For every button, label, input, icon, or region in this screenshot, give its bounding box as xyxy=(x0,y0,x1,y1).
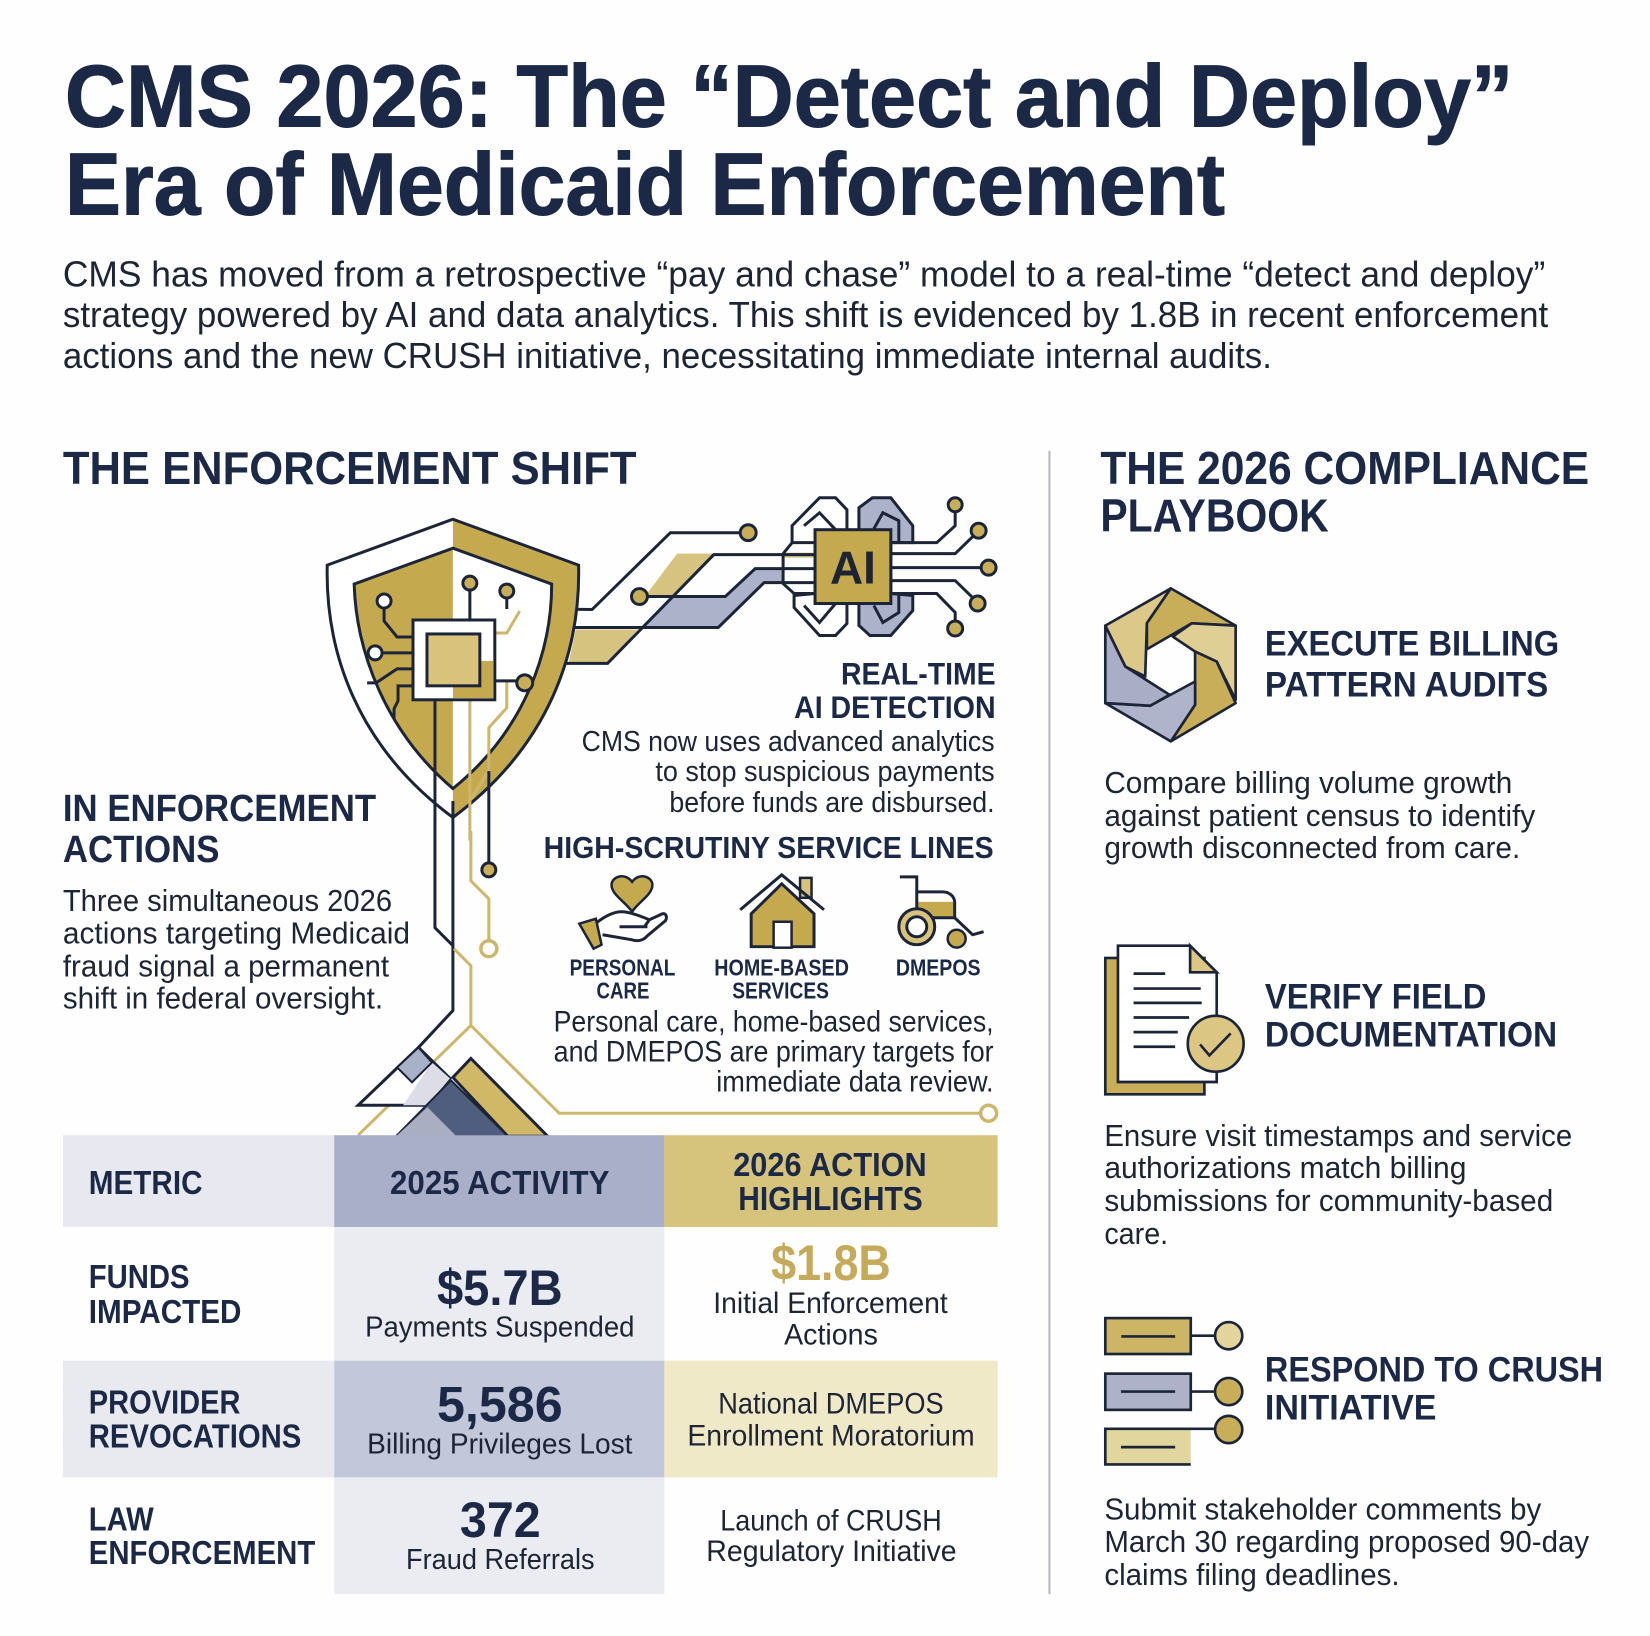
panel: respond to CRUSH initiative xyxy=(1104,1318,1603,1592)
comparison table xyxy=(63,1135,998,1594)
title xyxy=(65,48,1513,233)
table row: provider revocations xyxy=(89,1377,975,1460)
text: in enforcement actions: actions targeting Medicaid xyxy=(63,916,410,951)
table row: law enforcement: 372 xyxy=(460,1492,541,1548)
heading: high-scrutiny service lines: HIGH-SCRUTINY SERVICE LINES xyxy=(544,830,994,865)
title: Era of Medicaid Enforcement xyxy=(65,135,1225,233)
intro text block: CMS has moved from a retrospective “pay and chase” model to a real-time “detect and deploy” xyxy=(63,253,1545,294)
title: CMS 2026: The “Detect and Deploy” xyxy=(65,48,1513,146)
body text: field documentation: care. xyxy=(1104,1216,1168,1251)
text: real-time AI detection: to stop suspicious payments xyxy=(655,756,995,788)
text: in enforcement actions xyxy=(63,788,410,1016)
table row: funds impacted: Actions xyxy=(784,1319,878,1352)
text: real-time AI detection xyxy=(582,655,996,819)
circuit traces between shield and AI brain xyxy=(495,525,815,663)
table header row xyxy=(89,1146,927,1217)
table row: funds impacted: $5.7B xyxy=(437,1260,563,1316)
heading: verify field documentation: VERIFY FIELD xyxy=(1265,978,1486,1017)
icon: home-based services xyxy=(740,875,824,948)
heading: execute billing pattern audits: PATTERN AUDITS xyxy=(1265,665,1548,704)
table row: law enforcement: ENFORCEMENT xyxy=(89,1534,315,1571)
body text: field documentation: submissions for community-based xyxy=(1104,1183,1553,1218)
body text: billing audits: growth disconnected from care. xyxy=(1104,830,1520,865)
panel: execute billing pattern audits xyxy=(1104,588,1559,865)
geometric arrow shapes above the table xyxy=(358,1047,548,1136)
heading: verify field documentation xyxy=(1265,978,1557,1054)
table header row: HIGHLIGHTS xyxy=(738,1180,923,1217)
table row: funds impacted: IMPACTED xyxy=(89,1293,241,1330)
table row: provider revocations: REVOCATIONS xyxy=(89,1417,301,1454)
table row: provider revocations: Enrollment Moratorium xyxy=(687,1419,975,1452)
text: real-time AI detection: AI DETECTION xyxy=(794,689,996,725)
intro text block: strategy powered by AI and data analytics. This shift is evidenced by 1.8B in recent enforcement xyxy=(63,294,1548,335)
table row: provider revocations: PROVIDER xyxy=(89,1384,241,1421)
table row: funds impacted: FUNDS xyxy=(89,1258,190,1295)
service line labels: SERVICES xyxy=(732,978,829,1004)
panel: verify field documentation xyxy=(1104,946,1572,1251)
table row: law enforcement xyxy=(89,1492,957,1576)
body text: CRUSH initiative: Submit stakeholder comments by xyxy=(1104,1491,1542,1526)
circuit lines descending from shield xyxy=(358,771,997,1135)
heading: execute billing pattern audits: EXECUTE BILLING xyxy=(1265,624,1559,663)
icon: document with check xyxy=(1105,946,1244,1094)
service line labels: DMEPOS xyxy=(896,955,981,981)
service line labels: HOME-BASED xyxy=(714,955,849,981)
table row: law enforcement: Launch of CRUSH xyxy=(720,1504,942,1537)
table row: funds impacted xyxy=(89,1235,948,1352)
table header row: 2025 ACTIVITY xyxy=(390,1164,610,1201)
table row: provider revocations: Billing Privileges Lost xyxy=(367,1428,632,1460)
service line labels: CARE xyxy=(597,978,649,1004)
icon: linked form fields xyxy=(1105,1318,1242,1464)
text: in enforcement actions: shift in federal oversight. xyxy=(63,981,383,1016)
table row: law enforcement: Regulatory Initiative xyxy=(706,1535,957,1568)
table row: funds impacted: Initial Enforcement xyxy=(713,1287,948,1320)
text: in enforcement actions: IN ENFORCEMENT xyxy=(63,788,376,830)
service line description: immediate data review. xyxy=(716,1065,994,1098)
icon: shield with chip xyxy=(327,519,579,840)
panel: high-scrutiny service lines xyxy=(544,830,994,1098)
text: in enforcement actions: Three simultaneous 2026 xyxy=(63,883,392,918)
body text: CRUSH initiative: March 30 regarding proposed 90-day xyxy=(1104,1524,1590,1559)
table row: funds impacted: Payments Suspended xyxy=(365,1312,634,1344)
intro text block xyxy=(63,253,1548,376)
icon: hexagon aperture xyxy=(1105,588,1236,741)
service line labels: PERSONAL xyxy=(570,955,675,981)
heading: verify field documentation: DOCUMENTATION xyxy=(1265,1015,1557,1054)
body text: billing audits: Compare billing volume growth xyxy=(1104,765,1512,800)
text: in enforcement actions: ACTIONS xyxy=(63,829,219,871)
body text: billing audits: against patient census to identify xyxy=(1104,798,1536,833)
text: real-time AI detection: REAL-TIME xyxy=(841,655,996,691)
body text: CRUSH initiative: claims filing deadlines. xyxy=(1104,1557,1400,1592)
heading: compliance playbook: PLAYBOOK xyxy=(1100,490,1329,542)
service line description: Personal care, home-based services, xyxy=(554,1005,994,1038)
icon: personal care xyxy=(579,876,666,949)
icon: DMEPOS wheelchair xyxy=(899,877,984,948)
heading: respond to CRUSH initiative: RESPOND TO CRUSH xyxy=(1265,1351,1603,1390)
table header row: 2026 ACTION xyxy=(733,1146,927,1183)
text: in enforcement actions: fraud signal a permanent xyxy=(63,949,389,984)
intro text block: actions and the new CRUSH initiative, necessitating immediate internal audits. xyxy=(63,335,1272,376)
heading: compliance playbook xyxy=(1100,442,1589,542)
body text: billing audits xyxy=(1104,765,1536,865)
heading: respond to CRUSH initiative xyxy=(1265,1351,1603,1428)
heading: execute billing pattern audits xyxy=(1265,624,1559,704)
service line description xyxy=(554,1005,994,1098)
body text: CRUSH initiative xyxy=(1104,1491,1590,1592)
text: real-time AI detection: CMS now uses advanced analytics xyxy=(582,726,995,758)
body text: field documentation xyxy=(1104,1118,1572,1251)
text: real-time AI detection: before funds are disbursed. xyxy=(669,787,995,819)
table row: provider revocations: 5,586 xyxy=(437,1377,563,1433)
table row: funds impacted: $1.8B xyxy=(771,1235,891,1291)
table row: provider revocations: National DMEPOS xyxy=(718,1388,944,1421)
heading: the enforcement shift: THE ENFORCEMENT SHIFT xyxy=(63,442,636,494)
table row: law enforcement: Fraud Referrals xyxy=(406,1544,595,1576)
service line description: and DMEPOS are primary targets for xyxy=(554,1035,994,1068)
icon: AI brain chip: AI xyxy=(830,542,876,594)
heading: compliance playbook: THE 2026 COMPLIANCE xyxy=(1100,442,1589,494)
body text: field documentation: Ensure visit timestamps and service xyxy=(1104,1118,1572,1153)
heading: respond to CRUSH initiative: INITIATIVE xyxy=(1265,1389,1437,1428)
icon: AI brain chip xyxy=(783,498,996,636)
service line labels xyxy=(570,955,981,1004)
table row: law enforcement: LAW xyxy=(89,1500,154,1537)
body text: field documentation: authorizations match billing xyxy=(1104,1150,1466,1185)
table header row: METRIC xyxy=(89,1164,203,1201)
